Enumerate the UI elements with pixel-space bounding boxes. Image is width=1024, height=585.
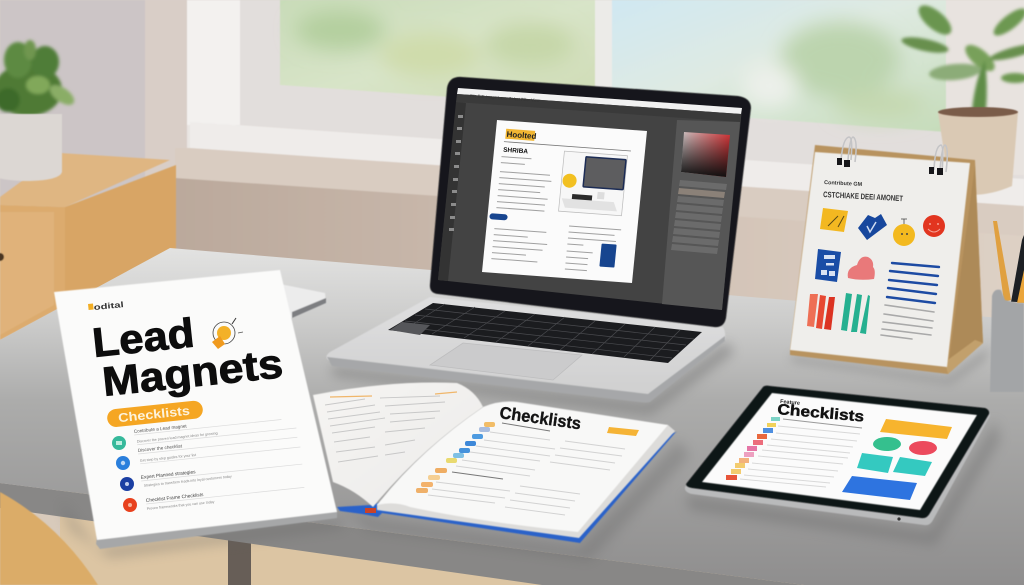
pencil cup: desk organizer [990,221,1024,392]
icon: green bars [841,293,870,334]
closed laptop: device behind the book [280,284,326,318]
teal card left [857,453,893,473]
right page [377,402,668,532]
calendar stand [790,145,983,374]
calendar heading: Contribute GM [824,180,863,188]
row 4 [123,481,305,512]
row 1: Contribute a Lead magnet [134,423,188,434]
page illustration [559,151,627,216]
page blue card [599,244,617,268]
teal card right [893,457,932,476]
icon: red bars [807,294,835,330]
row 1: Discover the proven lead magnet ideas for growing [137,431,218,444]
calendar heading: CSTCHIAKE DEEI AMONET [823,190,903,203]
checklist bullets [416,422,495,493]
editor menu text: File Edit Image Layer Select Filter View [470,93,540,103]
brand mark [88,300,124,312]
calendar rings [837,137,947,175]
laptop screen: editor interface [438,88,742,310]
tablet body [685,387,990,525]
page body lines [491,157,627,273]
laptop lid [430,77,751,327]
icon: red smile [923,215,945,237]
shadow: laptop shadow [330,342,734,414]
page logo [505,129,535,141]
icon: pink cloud [848,257,875,280]
page heading: SHRIBA [503,147,529,155]
brand mark: odital [93,300,124,312]
book shadow [337,440,690,560]
tablet screen [702,393,977,510]
pencils [993,221,1024,303]
row 2: Get step by step guides for your list [140,453,196,463]
red bubble [909,441,937,455]
row 2: Discover the checklist [138,443,183,453]
book pages edge [96,508,337,549]
row 4: Checklist Frame Checklists [146,492,204,504]
book cover [54,270,337,540]
calendar: desk flip calendar [790,137,990,384]
page blue button [489,213,508,220]
home port [897,517,901,521]
row 1 [112,412,296,450]
laptop front edge [327,336,725,402]
row 2 [116,431,300,470]
color picker panel [681,132,730,177]
left page text lines [325,396,445,462]
row 4: Proven frameworks that you can use today [147,500,215,511]
green bubble [873,437,901,451]
tool strip icons [449,115,463,231]
row 3 [120,458,303,491]
calendar checklist lines [881,263,939,339]
title: Lead Magnets: Lead [90,310,196,366]
left page [313,382,483,507]
icon: yellow sticky note [820,208,848,232]
open book: checklists workbook [313,382,690,560]
laptop: open laptop with editor [326,77,751,414]
left page accents [330,392,457,397]
calendar page [790,152,970,367]
row 3: Expert Planned strategies [141,469,196,481]
desk: gray tabletop [0,248,1024,585]
book shadow [60,500,345,558]
document page: Hoolted [506,130,537,141]
row 3: Strategies to transform leads into loyal customers today [144,474,232,488]
cup [990,290,1024,392]
screen text lines [740,419,862,487]
blue cover [337,432,677,543]
list: four feature rows [112,412,305,512]
trackpad [430,343,582,380]
icon: blue check badge [858,214,887,240]
cabinet: wooden drawer unit [0,153,176,340]
right page heading: Checklists [498,403,582,433]
screen brand: Feature [780,399,800,407]
calendar shadow [790,345,990,384]
plant: potted plant on the right [900,0,1024,195]
tablet: checklists on tablet [685,386,1000,545]
orange info card [880,419,952,439]
screen heading: Checklists [777,401,865,426]
document page [482,120,647,283]
pill: Checklists [106,400,204,428]
plant: potted plant on cabinet [0,40,77,181]
pill: Checklists: Checklists [118,404,191,425]
keyboard [388,303,702,363]
chair: wooden chair back [0,492,98,585]
title: Lead Magnets: Magnets [100,340,285,405]
right page text lines [428,423,625,515]
blue card [842,476,917,500]
icon: yellow circle face [893,219,915,246]
orange tag [607,427,639,436]
calendar heading [823,180,903,203]
title: Lead Magnets [90,310,285,405]
icon: lightbulb [212,318,243,349]
tablet shadow [685,420,1000,545]
screen checklist tags [726,417,780,480]
icon: blue calculator [815,249,841,282]
lead magnets book: cover [54,270,345,558]
layers panel [671,180,727,254]
laptop base [326,297,725,399]
red bookmark [365,508,376,513]
